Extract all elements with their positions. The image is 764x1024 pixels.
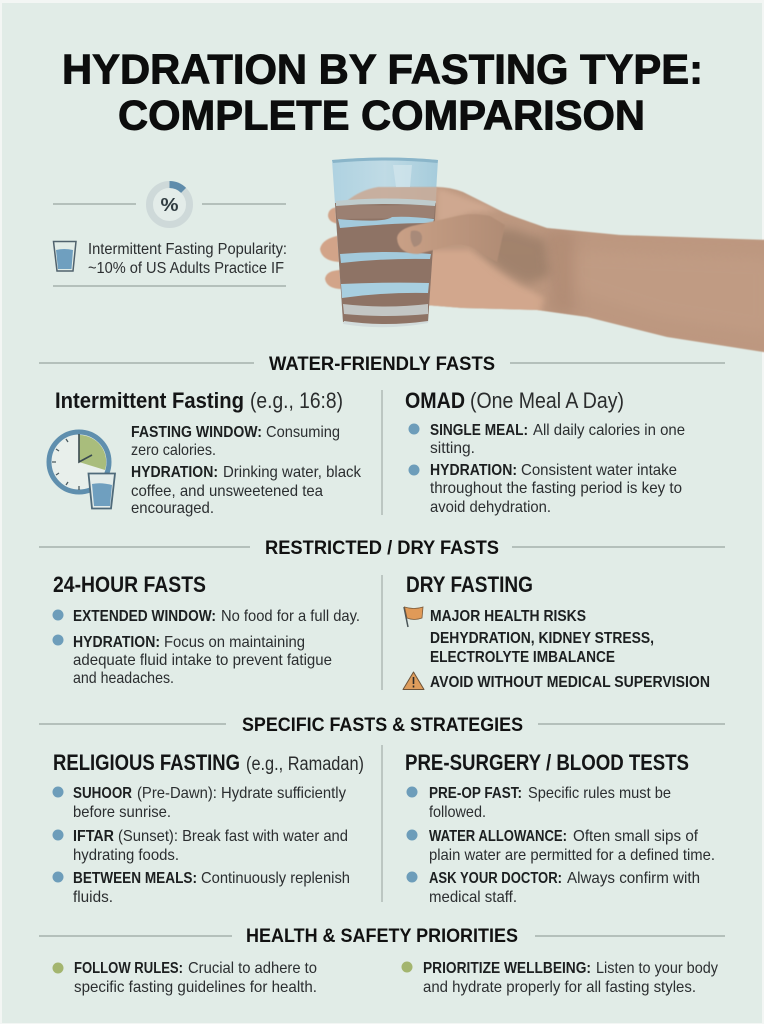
photo: hand holding a glass of water [320, 158, 764, 353]
panel: religious fasting: Continuously replenish [201, 870, 350, 887]
panel: religious fasting [52, 750, 364, 906]
panel: intermittent fasting: coffee, and unsweetened tea [131, 483, 323, 500]
panel: follow rules: specific fasting guidelines for health. [74, 979, 317, 996]
title [62, 46, 703, 138]
panel: religious fasting: IFTAR [73, 828, 114, 845]
panel: religious fasting: fluids. [73, 889, 113, 906]
panel: intermittent fasting: HYDRATION: [131, 464, 218, 481]
panel: 24-hour fasts: 24-HOUR FASTS [53, 572, 206, 597]
icon: clock with glass [49, 432, 115, 508]
panel: pre-surgery / blood tests: Often small sips of [573, 828, 699, 845]
panel: prioritize wellbeing [402, 960, 718, 996]
panel: pre-surgery / blood tests [405, 750, 715, 906]
section heading: specific fasts and strategies: SPECIFIC FASTS & STRATEGIES [242, 715, 523, 736]
panel: follow rules: Crucial to adhere to [188, 960, 317, 977]
panel: intermittent fasting: Drinking water, black [223, 464, 362, 481]
icon: water glass [54, 242, 76, 271]
panel: pre-surgery / blood tests: Specific rules must be [528, 785, 671, 802]
statistic text [88, 241, 287, 277]
panel: pre-surgery / blood tests: PRE-OP FAST: [429, 785, 522, 802]
panel: 24-hour fasts: HYDRATION: [73, 634, 160, 651]
panel: pre-surgery / blood tests: WATER ALLOWANCE: [429, 828, 567, 845]
panel: follow rules [52, 960, 317, 996]
panel: religious fasting: BETWEEN MEALS: [73, 870, 197, 887]
panel: dry fasting: ELECTROLYTE IMBALANCE [430, 649, 615, 666]
panel: intermittent fasting: Consuming [266, 424, 340, 441]
panel: OMAD: SINGLE MEAL: [430, 422, 528, 439]
panel: dry fasting: AVOID WITHOUT MEDICAL SUPERVISION [430, 674, 710, 691]
icon: percent donut [150, 184, 190, 224]
panel: OMAD: HYDRATION: [430, 462, 517, 479]
panel: pre-surgery / blood tests: ASK YOUR DOCTOR: [429, 870, 562, 887]
panel: prioritize wellbeing: Listen to your body [596, 960, 718, 977]
forearm and hand [400, 187, 764, 353]
panel: dry fasting: DRY FASTING [406, 572, 533, 597]
panel: OMAD: OMAD [405, 388, 465, 413]
panel: religious fasting: (Sunset): Break fast with water and [118, 828, 348, 845]
panel: dry fasting: MAJOR HEALTH RISKS [430, 608, 586, 625]
panel: OMAD: sitting. [430, 440, 475, 457]
panel: pre-surgery / blood tests: Always confirm with [567, 870, 700, 887]
panel: 24-hour fasts [52, 572, 360, 687]
panel: prioritize wellbeing: PRIORITIZE WELLBEING: [423, 960, 591, 977]
panel: dry fasting: DEHYDRATION, KIDNEY STRESS, [430, 630, 654, 647]
panel: pre-surgery / blood tests: PRE-SURGERY / BLOOD TESTS [405, 750, 689, 775]
panel: intermittent fasting: Intermittent Fasting [55, 388, 244, 413]
panel: religious fasting: hydrating foods. [73, 847, 179, 864]
statistic text: ~10% of US Adults Practice IF [88, 260, 284, 277]
glass [332, 158, 438, 326]
statistic text: Intermittent Fasting Popularity: [88, 241, 287, 258]
panel: religious fasting: before sunrise. [73, 804, 171, 821]
fingers behind glass [320, 207, 342, 289]
thumb [397, 214, 505, 262]
water inside glass [335, 203, 436, 325]
panel: 24-hour fasts: adequate fluid intake to prevent fatigue [73, 652, 332, 669]
statistic panel: intermittent fasting popularity [53, 184, 287, 286]
panel: OMAD: throughout the fasting period is key to [430, 480, 682, 497]
panel: religious fasting: SUHOOR [73, 785, 132, 802]
panel: dry fasting [403, 572, 710, 691]
wrist shadow [478, 229, 550, 284]
panel: OMAD: avoid dehydration. [430, 499, 551, 516]
icon: warning flag [404, 607, 423, 627]
panel: pre-surgery / blood tests: plain water are permitted for a defined time. [429, 847, 715, 864]
panel: prioritize wellbeing: and hydrate properly for all fasting styles. [423, 979, 696, 996]
panel: intermittent fasting [49, 388, 362, 517]
panel: follow rules: FOLLOW RULES: [74, 960, 183, 977]
panel: religious fasting: (e.g., Ramadan) [246, 754, 364, 775]
panel: religious fasting: (Pre-Dawn): Hydrate sufficiently [137, 785, 346, 802]
panel: 24-hour fasts: and headaches. [73, 670, 174, 687]
panel: OMAD: Consistent water intake [521, 462, 677, 479]
icon: percent donut: % [160, 195, 178, 215]
panel: OMAD: All daily calories in one [533, 422, 685, 439]
panel: 24-hour fasts: Focus on maintaining [164, 634, 305, 651]
panel: 24-hour fasts: EXTENDED WINDOW: [73, 608, 216, 625]
panel: OMAD [405, 388, 685, 516]
panel: pre-surgery / blood tests: medical staff. [429, 889, 517, 906]
section heading: restricted / dry fasts: RESTRICTED / DRY FASTS [265, 538, 499, 559]
panel: 24-hour fasts: No food for a full day. [221, 608, 360, 625]
section heading: health and safety priorities: HEALTH & SAFETY PRIORITIES [246, 926, 518, 947]
panel: religious fasting: RELIGIOUS FASTING [53, 750, 240, 775]
panel: intermittent fasting: (e.g., 16:8) [250, 388, 343, 413]
panel: intermittent fasting: FASTING WINDOW: [131, 424, 262, 441]
section heading: water-friendly fasts: WATER-FRIENDLY FASTS [269, 354, 495, 375]
title: HYDRATION BY FASTING TYPE: [62, 46, 703, 92]
icon: warning triangle [403, 672, 424, 690]
panel: intermittent fasting: zero calories. [131, 442, 216, 459]
panel: OMAD: (One Meal A Day) [470, 388, 624, 413]
title: COMPLETE COMPARISON [118, 92, 645, 138]
panel: intermittent fasting: encouraged. [131, 500, 214, 517]
panel: pre-surgery / blood tests: followed. [429, 804, 486, 821]
